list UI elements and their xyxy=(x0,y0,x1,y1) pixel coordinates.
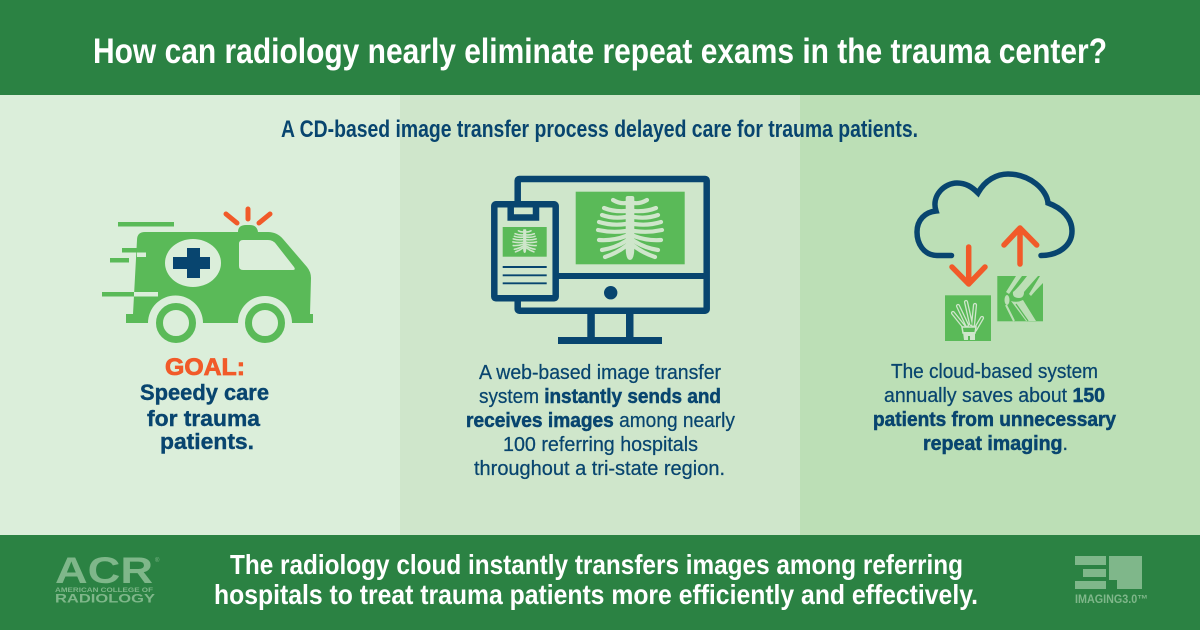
footer text: hospitals to treat trauma patients more efficiently and effectively. xyxy=(214,579,978,610)
goal text: patients. xyxy=(160,429,254,454)
cloud-based text: The cloud-based system xyxy=(891,361,1098,383)
subheading: A CD-based image transfer process delayed care for trauma patients. xyxy=(281,116,918,143)
goal text xyxy=(140,380,269,454)
footer text: The radiology cloud instantly transfers images among referring xyxy=(230,549,963,580)
cloud-based text: annually saves about 150 xyxy=(884,385,1105,407)
goal text: Speedy care xyxy=(140,380,269,405)
web-based text: receives images among nearly xyxy=(466,410,735,432)
header banner xyxy=(0,0,1200,95)
column backgrounds xyxy=(0,95,1200,535)
web-based text xyxy=(466,362,735,480)
logo: ACR: AMERICAN COLLEGE OF xyxy=(55,587,153,594)
goal text: for trauma xyxy=(147,406,261,431)
web-based text: 100 referring hospitals xyxy=(503,434,698,456)
logo: Imaging 3.0: IMAGING3.0™ xyxy=(1075,594,1148,606)
logo: ACR xyxy=(55,550,160,606)
logo: ACR: ACR xyxy=(55,550,153,591)
panel: web-based transfer xyxy=(466,179,735,480)
goal label: GOAL: xyxy=(165,354,245,381)
icon: ambulance xyxy=(102,209,313,340)
footer text xyxy=(214,549,978,610)
cloud-based text: patients from unnecessary xyxy=(873,409,1117,431)
panel: goal xyxy=(102,209,313,454)
icon: cloud with arrows and x-rays xyxy=(917,174,1072,341)
web-based text: throughout a tri-state region. xyxy=(474,458,725,480)
panel: cloud-based system xyxy=(873,174,1117,455)
logo: ACR: ® xyxy=(155,557,160,564)
logo: ACR: RADIOLOGY xyxy=(55,592,155,606)
cloud-based text xyxy=(873,361,1117,455)
footer banner xyxy=(0,535,1200,630)
logo: Imaging 3.0 xyxy=(1075,556,1148,606)
web-based text: system instantly sends and xyxy=(479,386,721,408)
web-based text: A web-based image transfer xyxy=(479,362,721,384)
cloud-based text: repeat imaging. xyxy=(923,433,1068,455)
icon: monitor and clipboard xyxy=(494,179,707,344)
